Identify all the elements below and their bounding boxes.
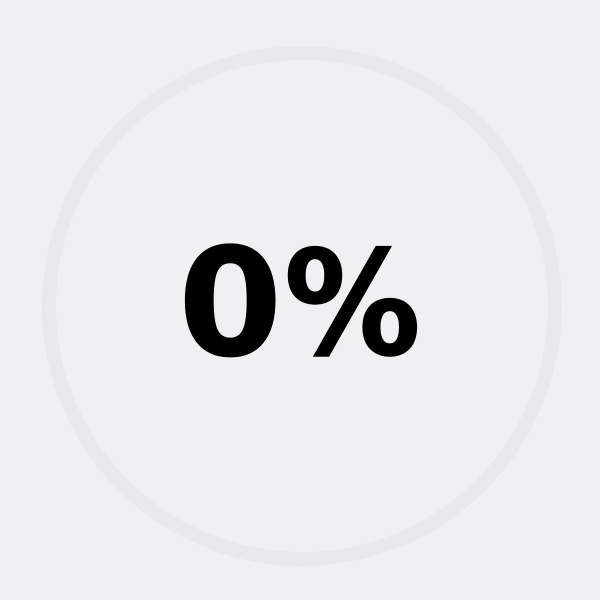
percent sign: %: [284, 220, 421, 389]
progress ring track: [49, 53, 555, 559]
percentage value: [178, 217, 421, 391]
digit zero: 0: [178, 217, 282, 391]
